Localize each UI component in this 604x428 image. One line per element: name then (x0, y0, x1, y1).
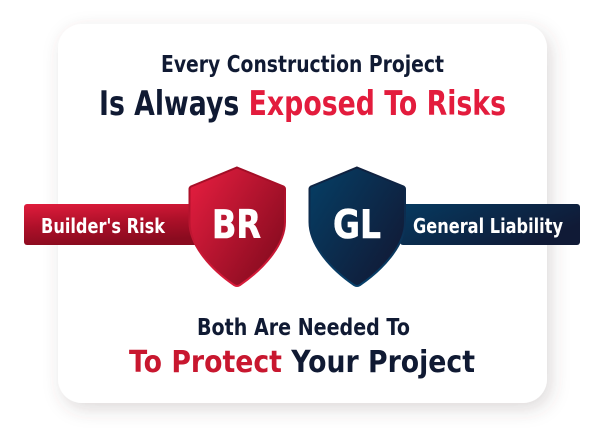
icon: red shield: BR (212, 203, 261, 248)
badge: builder's risk (24, 168, 285, 286)
label bar: builder's risk: Builder's Risk (41, 214, 166, 238)
panel: white card (58, 24, 547, 403)
badge: general liability (310, 168, 580, 286)
heading: top line: Every Construction Project (161, 50, 444, 78)
heading: both are needed: Both Are Needed To (197, 315, 410, 341)
icon: navy shield: GL (333, 203, 381, 248)
heading: protect your project: To Protect Your Project (129, 345, 475, 380)
icon: red shield (190, 168, 285, 286)
label bar: general liability: General Liability (413, 214, 563, 238)
label bar: general liability (400, 204, 580, 245)
heading: exposed to risks: Is Always Exposed To Risks (99, 84, 506, 123)
icon: navy shield (310, 168, 405, 286)
label bar: builder's risk (24, 204, 199, 245)
